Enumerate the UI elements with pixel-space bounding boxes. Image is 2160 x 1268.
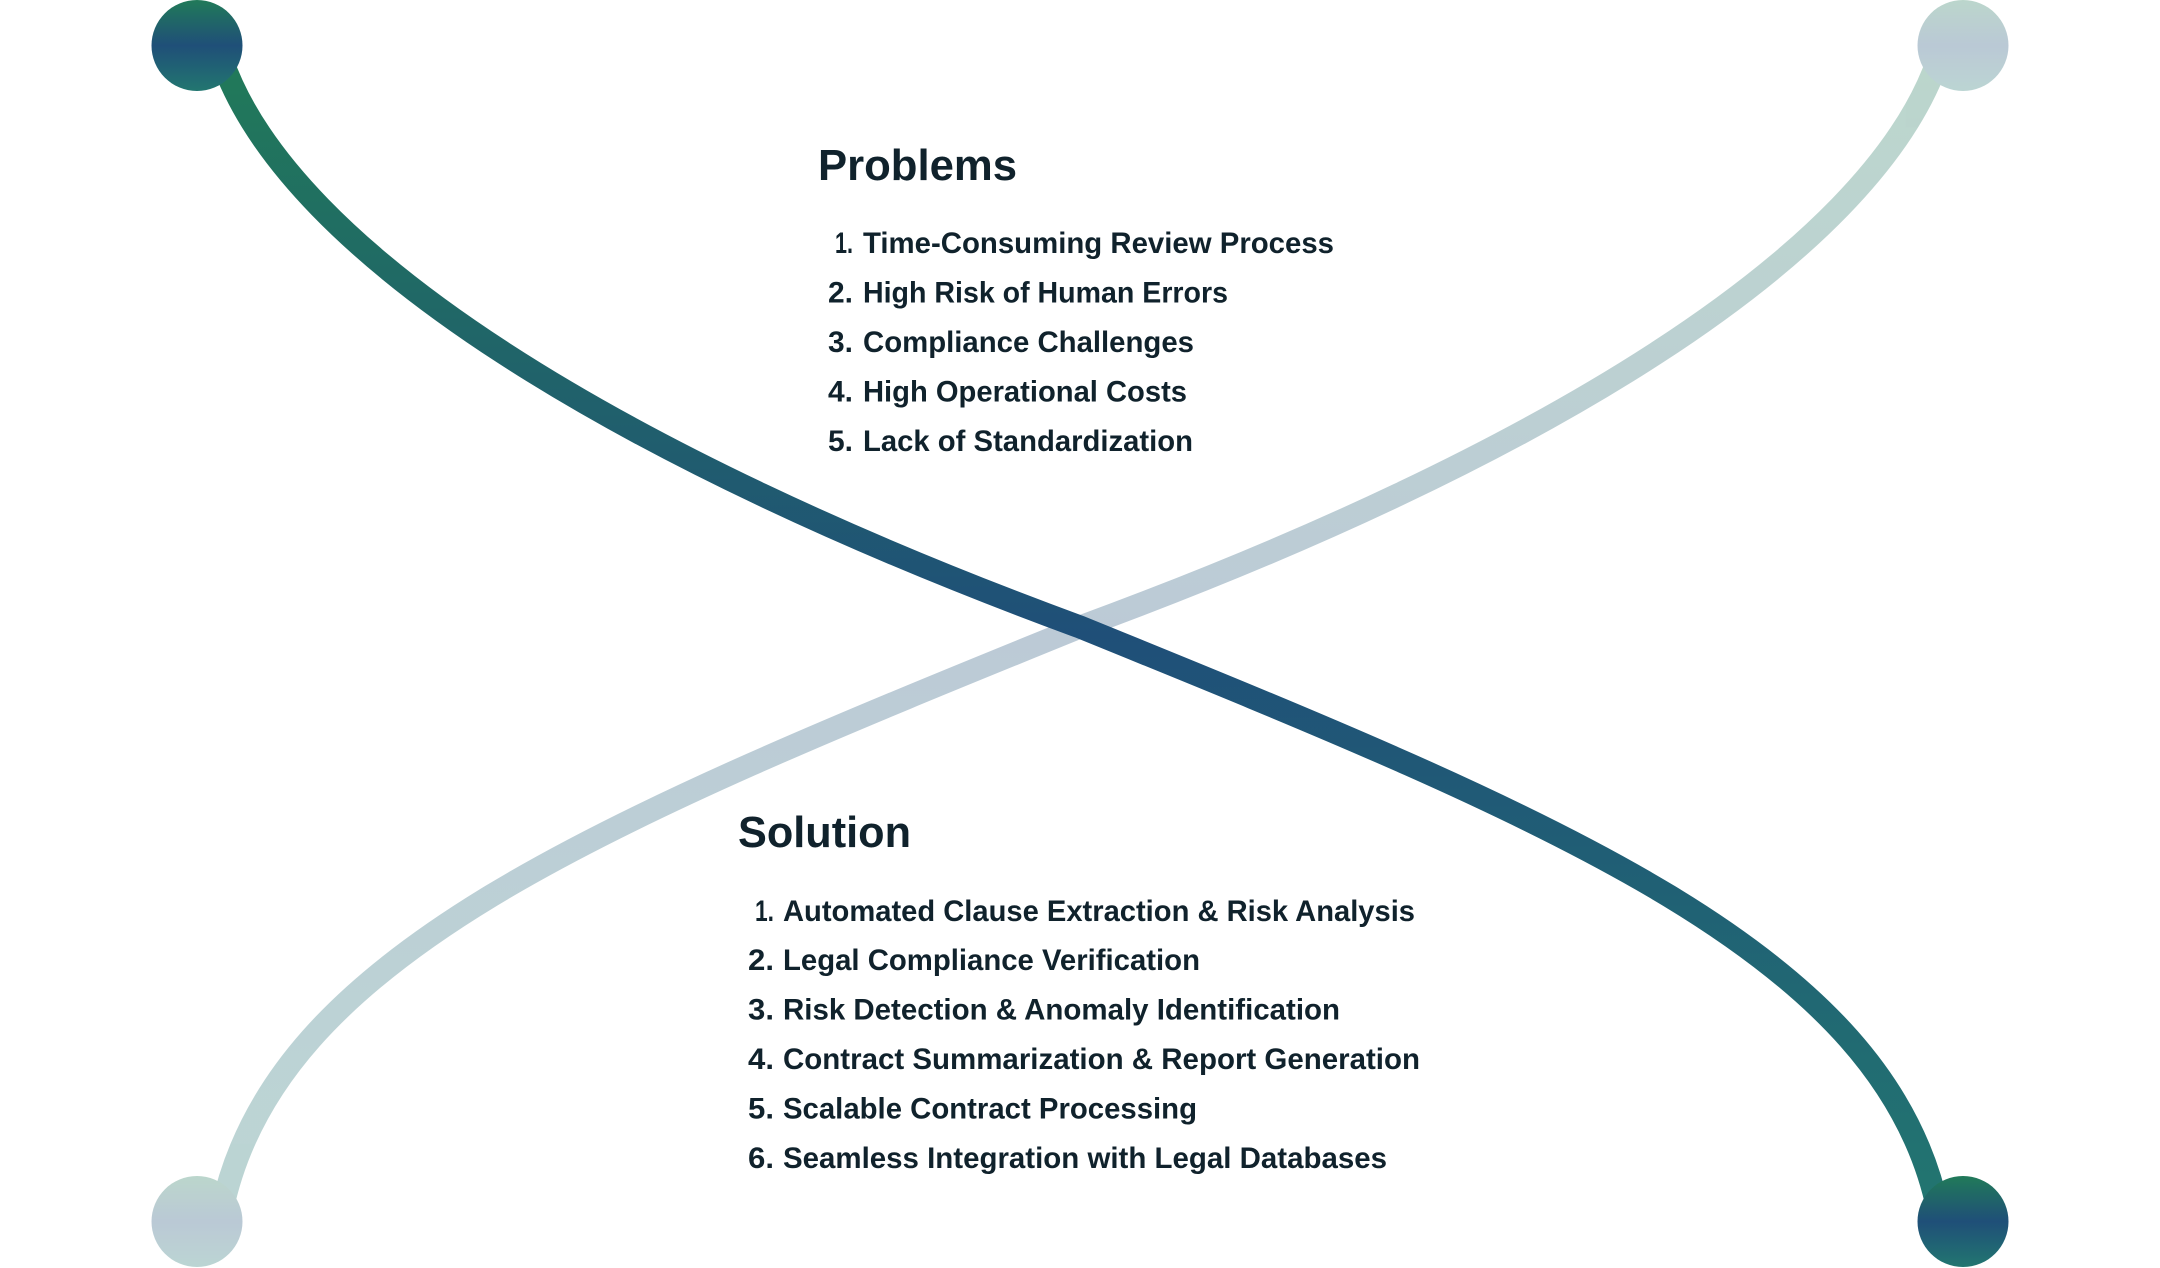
list: solution: Seamless Integration with Legal Databases — [783, 1142, 1387, 1175]
list: problems: 4. — [828, 376, 853, 408]
list: problems: 1. — [835, 227, 853, 260]
list: solution: Automated Clause Extraction & Risk Analysis — [783, 895, 1415, 928]
list: problems: 5. — [828, 425, 853, 458]
list: solution: 4. — [748, 1043, 774, 1076]
list: solution — [748, 895, 1420, 1175]
list: problems: High Operational Costs — [863, 376, 1187, 408]
list: problems: 2. — [828, 276, 853, 310]
list: solution: 3. — [748, 994, 774, 1026]
list: solution: Contract Summarization & Report Generation — [783, 1043, 1420, 1076]
heading: Solution: Solution — [738, 808, 911, 857]
list: solution: Scalable Contract Processing — [783, 1092, 1197, 1126]
list: solution: Legal Compliance Verification — [783, 944, 1200, 977]
list: problems: Time-Consuming Review Process — [863, 227, 1334, 260]
node: top-left dark circle — [152, 0, 242, 91]
list: solution: Risk Detection & Anomaly Identification — [783, 994, 1340, 1026]
list: problems: High Risk of Human Errors — [863, 276, 1228, 310]
list: solution: 2. — [748, 944, 774, 977]
node: bottom-right dark circle — [1918, 1176, 2008, 1267]
dark curve: top-left to bottom-right — [222, 60, 1938, 1210]
list: problems: 3. — [828, 326, 853, 359]
list: problems: Compliance Challenges — [863, 326, 1194, 359]
list: solution: 5. — [748, 1092, 774, 1126]
heading: Problems: Problems — [818, 141, 1017, 190]
list: solution: 6. — [748, 1142, 774, 1175]
list: problems: Lack of Standardization — [863, 425, 1193, 458]
list: problems — [828, 227, 1334, 458]
list: solution: 1. — [755, 895, 774, 928]
